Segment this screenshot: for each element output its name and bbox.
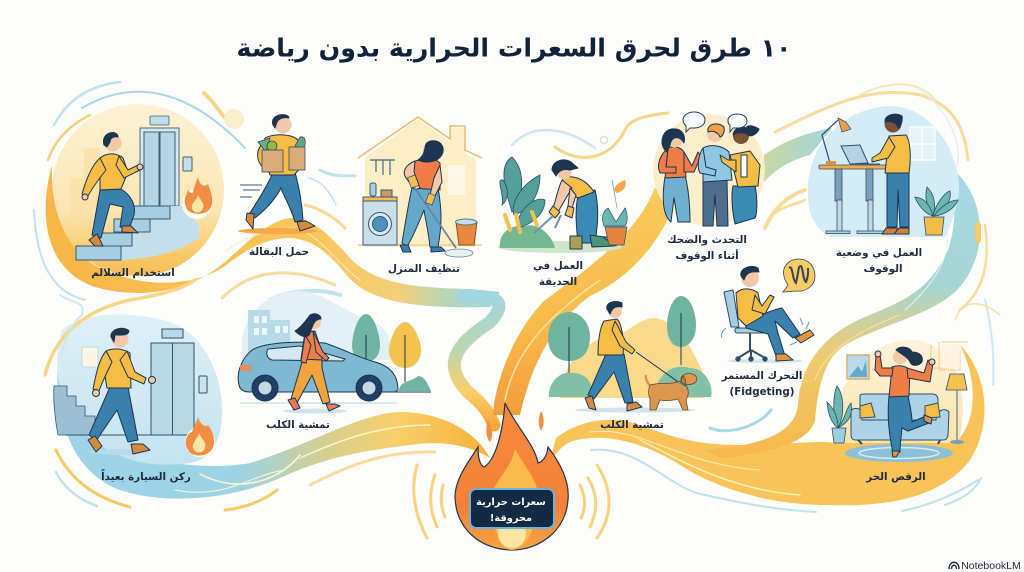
label: gardening: الحديقة (539, 276, 577, 288)
label: chat while standing: أثناء الوقوف (675, 249, 739, 262)
buildings (248, 310, 290, 352)
motion marks (721, 318, 809, 345)
yellow hills (560, 318, 704, 398)
man walking (246, 115, 315, 231)
ribbon: rising strand to desk (705, 165, 980, 458)
trees (352, 314, 431, 392)
speed lines (240, 185, 262, 197)
decorative swooshes (34, 82, 1000, 538)
backdrop blob (808, 106, 959, 237)
standing desk (819, 165, 895, 234)
house (358, 117, 482, 247)
label box: محروقة! (490, 513, 532, 524)
shadow (575, 408, 695, 412)
ribbon: lower left blue path (57, 330, 490, 499)
car (238, 342, 398, 403)
label: gardening (533, 260, 583, 288)
window (910, 127, 935, 160)
backdrop circle (653, 114, 765, 226)
yellow leaves (505, 212, 537, 232)
stairs (76, 206, 199, 260)
panel: carry groceries (238, 115, 318, 234)
panel: car and walk (238, 291, 431, 414)
elevator (140, 116, 192, 206)
panel: free dance (827, 342, 968, 462)
panel: use the stairs (70, 116, 212, 279)
label: dog walk: تمشية الكلب (600, 419, 664, 431)
label box: سعرات حرارية (476, 497, 546, 508)
shadow (90, 449, 150, 455)
picture frame (82, 347, 98, 367)
label: gardening: العمل في (533, 260, 583, 272)
flow ribbons (46, 104, 984, 505)
grocery bags (258, 137, 305, 172)
label: fidgeting: (Fidgeting) (730, 386, 794, 398)
office chair (724, 290, 770, 361)
woman right (720, 126, 760, 224)
title: ١٠ طرق لحرق السعرات الحرارية بدون رياضة (236, 34, 792, 64)
ribbon: teal shard chat to desk (764, 128, 832, 182)
ribbon: central strand down to flame (454, 296, 499, 425)
label: fidgeting: التحرك المستمر (721, 370, 802, 382)
man with leash (585, 302, 642, 411)
sofa (851, 394, 949, 444)
bucket (456, 222, 477, 245)
label: استخدام السلالم (91, 267, 175, 279)
label: car and walk: تمشية الكلب (266, 419, 330, 431)
floor line (65, 434, 194, 436)
label: standing desk: العمل في وضعية (836, 247, 922, 259)
man centre (698, 124, 732, 226)
man fidgeting (736, 266, 814, 361)
woman gardening (549, 160, 616, 249)
label: standing desk: الوقوف (863, 263, 903, 275)
footer: NotebookLM mark: NotebookLM (961, 560, 1021, 572)
ribbon: lower right golden path (550, 345, 984, 505)
label: standing desk (836, 247, 922, 275)
panel backdrop: dance room (833, 340, 963, 443)
man climbing (82, 133, 143, 246)
woman mopping (400, 141, 445, 252)
pot plant (603, 180, 627, 245)
tool (534, 215, 561, 233)
elevator (151, 329, 207, 435)
dog (646, 374, 697, 410)
panel: standing desk (808, 106, 959, 237)
laptop (841, 145, 880, 164)
speech bubbles (683, 112, 747, 132)
label: carry groceries: حمل البقالة (249, 246, 309, 258)
flame outline (455, 403, 568, 550)
icon: small flame (185, 417, 215, 457)
bush (500, 225, 555, 248)
washing machine (363, 183, 397, 245)
rug (845, 444, 953, 462)
small sparks (486, 411, 544, 442)
mop (408, 175, 473, 257)
ribbon: central flame to chat (493, 187, 672, 415)
label: chat while standing: التحدث والضحك (667, 234, 747, 246)
backdrop house outline (70, 148, 100, 225)
panel backdrop: stairs circle (52, 104, 224, 276)
label: ركن السيارة بعيداً (101, 469, 191, 483)
core (498, 518, 526, 548)
ground (498, 241, 622, 253)
city backdrop (242, 291, 391, 360)
man at desk (872, 114, 910, 234)
plants (500, 157, 545, 228)
potted plant (915, 187, 958, 235)
shadow (283, 408, 347, 414)
panel backdrop: parking blob (57, 314, 222, 465)
logo icon (949, 562, 959, 569)
utensils (370, 160, 395, 175)
woman left (658, 129, 701, 222)
stairs (54, 386, 95, 435)
lamp (822, 118, 851, 165)
label: free dance: الرقص الحر (865, 471, 926, 483)
shadow (238, 228, 318, 234)
label: chat while standing (667, 234, 747, 262)
leash (636, 352, 681, 384)
label: clean the house: تنظيف المنزل (388, 263, 460, 275)
panel: dog walk (548, 296, 712, 412)
panel: chat while standing (653, 112, 765, 226)
woman walking (288, 314, 340, 411)
panel: gardening (498, 157, 627, 253)
man walking (88, 328, 156, 454)
picture frame (847, 355, 869, 379)
woman dancing (875, 347, 935, 457)
icon: small flame (182, 177, 212, 219)
plant (827, 386, 852, 443)
panel: clean the house (358, 117, 482, 257)
floor lamp (946, 374, 967, 444)
panel: fidgeting (721, 259, 815, 363)
ribbon: top left golden path (46, 165, 500, 307)
inner flame (492, 448, 538, 550)
trees (548, 296, 712, 397)
window decor (931, 342, 968, 370)
shadow (727, 359, 803, 363)
label box (470, 489, 554, 528)
label: fidgeting (721, 370, 802, 398)
speech bubble: spring (783, 259, 815, 292)
central flame badge (455, 403, 568, 550)
panel: park far away (54, 328, 215, 483)
